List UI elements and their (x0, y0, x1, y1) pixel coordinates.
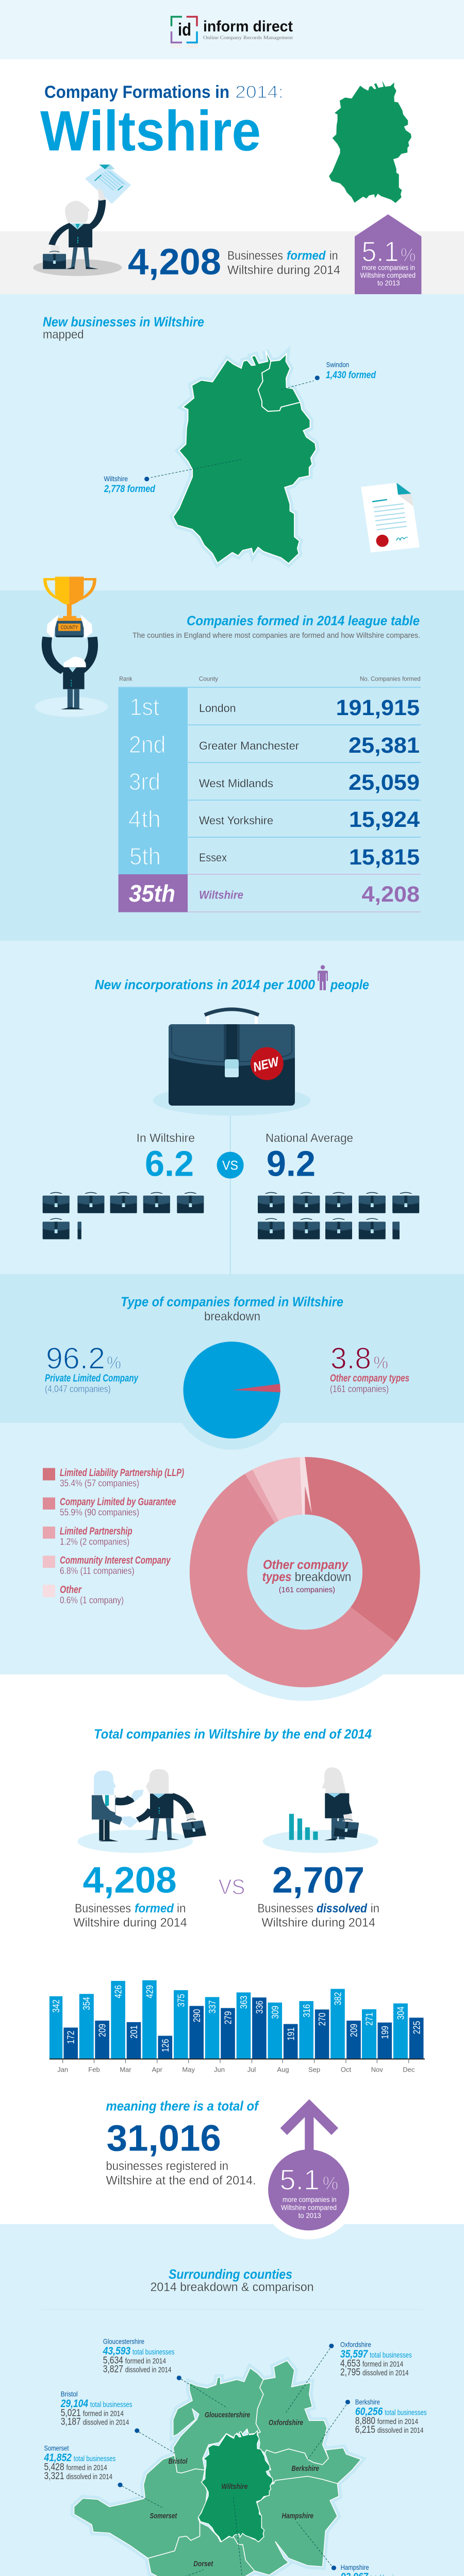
callout: 5.1% growth arrow: more companies in (283, 2195, 337, 2204)
stat: other company types: % (373, 1353, 388, 1373)
map labels: Berkshire (291, 2464, 319, 2473)
table: companies formed 2014: County (199, 675, 218, 683)
callout: Berkshire: 6,215 (355, 2425, 375, 2435)
donut chart: other company types: Other company (263, 1558, 349, 1572)
figure: two men shaking hands (77, 1769, 206, 1853)
table: companies formed 2014: Essex (199, 851, 227, 864)
icons: 6.2 briefcases (43, 1193, 204, 1239)
bar chart: formed and dissolved by month: 126 (160, 2039, 171, 2052)
pie chart: company types (172, 1330, 292, 1450)
stat: total of 31,016 (106, 2098, 259, 2188)
heading: league table: Companies formed in 2014 league table (187, 613, 420, 629)
table: companies formed 2014: West Midlands (199, 777, 273, 790)
heading: surrounding counties (41, 2266, 422, 2310)
icon: large new briefcase: NEW (252, 1054, 281, 1075)
legend: other company types: 1.2% (2 companies) (60, 1536, 129, 1547)
callout: Oxfordshire: total businesses (370, 2351, 412, 2360)
map labels: Bristol (169, 2457, 188, 2466)
table: companies formed 2014: 25,381 (349, 733, 420, 758)
stat: 4,208 businesses formed: Businesses (227, 249, 283, 263)
comparison: formed vs dissolved: 2,707 (272, 1860, 364, 1901)
map labels: Hampshire (281, 2512, 313, 2520)
bar chart: formed and dissolved by month: Oct (341, 2066, 351, 2074)
stat: 4,208 businesses formed: 4,208 (128, 242, 221, 283)
callout: Bristol (60, 2389, 132, 2428)
comparison: formed vs dissolved: Wiltshire during 2014 (262, 1916, 375, 1930)
heading: league table (132, 613, 420, 640)
callout: Hampshire: Hampshire (341, 2563, 369, 2571)
callout: Somerset (44, 2444, 115, 2482)
comparison: 6.2 vs 9.2: In Wiltshire (137, 1131, 195, 1145)
bar chart: formed and dissolved by month: 199 (380, 2026, 390, 2039)
stat: other company types (330, 1342, 409, 1394)
heading: league table: The counties in England where most companies are formed and how Wiltshire compares. (132, 631, 420, 640)
table: companies formed 2014: Wiltshire (199, 888, 243, 902)
comparison: formed vs dissolved: Businesses (257, 1902, 313, 1916)
map: Wiltshire hero (329, 80, 411, 203)
bar chart: formed and dissolved by month: Aug (277, 2066, 289, 2074)
donut chart: other company types: (161 companies) (279, 1586, 335, 1595)
callout: Gloucestershire (103, 2337, 174, 2375)
figure: man dissolving business with falling bars (263, 1768, 378, 1853)
legend: other company types: 55.9% (90 companies) (60, 1507, 139, 1518)
legend: other company types: 6.8% (11 companies) (60, 1566, 135, 1576)
callout: 5.1% more companies: more companies in (362, 263, 415, 272)
bar chart: formed and dissolved by month: 337 (207, 2000, 218, 2013)
callout: Oxfordshire: 4,653 (340, 2358, 360, 2369)
bar chart: formed and dissolved by month: 271 (364, 2012, 374, 2026)
bar chart: formed and dissolved by month: 191 (286, 2027, 296, 2041)
bar chart: formed and dissolved by month: 316 (302, 2004, 312, 2018)
legend: other company types: Limited Partnership (60, 1526, 132, 1537)
comparison: formed vs dissolved: in (371, 1902, 379, 1916)
table: companies formed 2014: 3rd (129, 768, 160, 795)
callout: Gloucestershire: formed in 2014 (125, 2357, 166, 2365)
map labels: Somerset (150, 2512, 177, 2520)
callout: Bristol: 3,187 (61, 2416, 81, 2427)
callout: Berkshire: 8,880 (355, 2416, 375, 2427)
bar chart: formed and dissolved by month: 172 (66, 2031, 76, 2044)
label: Swindon: 1,430 formed (326, 370, 376, 381)
stat: other company types: (161 companies) (330, 1384, 389, 1394)
table: companies formed 2014: 4th (128, 806, 161, 833)
legend: other company types (43, 1467, 184, 1605)
icons: 9.2 briefcases (258, 1193, 419, 1239)
legend: other company types: 35.4% (57 companies) (60, 1478, 139, 1488)
callout: 5.1% growth arrow: to 2013 (299, 2211, 321, 2219)
table: companies formed 2014: London (199, 702, 236, 715)
logo: Online Company Records Management (203, 36, 293, 41)
bar chart: formed and dissolved by month: Jun (214, 2066, 225, 2074)
callout: Gloucestershire: 3,827 (103, 2364, 123, 2375)
comparison: formed vs dissolved (73, 1860, 379, 1930)
callout: Gloucestershire: total businesses (132, 2348, 175, 2357)
map labels (150, 2411, 319, 2568)
bar chart: formed and dissolved by month: Jan (57, 2066, 68, 2074)
bar chart: formed and dissolved by month: 279 (223, 2011, 233, 2024)
heading: type of companies: Type of companies formed in Wiltshire (121, 1294, 343, 1310)
heading: new businesses mapped: mapped (43, 328, 84, 342)
comparison: formed vs dissolved: Wiltshire during 2014 (73, 1916, 187, 1930)
label: Swindon: Swindon (326, 361, 349, 369)
heading: new businesses mapped: New businesses in Wiltshire (43, 314, 204, 330)
bar chart: formed and dissolved by month: Apr (152, 2066, 163, 2074)
table: companies formed 2014: 15,815 (349, 845, 420, 870)
stat: private limited company: % (107, 1353, 121, 1373)
comparison: 6.2 vs 9.2 (137, 1131, 353, 1183)
heading: surrounding counties: Surrounding counties (169, 2266, 292, 2282)
table: companies formed 2014: Greater Manchester (199, 739, 299, 752)
stat: total of 31,016: businesses registered in (106, 2159, 228, 2173)
donut chart: other company types: types (262, 1570, 291, 1584)
legend: other company types: Community Interest Company (60, 1555, 171, 1566)
table: companies formed 2014: West Yorkshire (199, 814, 273, 827)
callout: Bristol: Bristol (61, 2389, 78, 2398)
table: companies formed 2014: 5th (129, 843, 161, 870)
callout: Gloucestershire: 5,634 (103, 2355, 123, 2366)
heading: surrounding counties: 2014 breakdown & comparison (151, 2280, 313, 2294)
heading: new incorporations per 1000 people: New incorporations in 2014 per 1000 (95, 977, 316, 992)
callout: Gloucestershire: dissolved in 2014 (125, 2365, 171, 2374)
comparison: 6.2 vs 9.2: VS (222, 1158, 238, 1173)
comparison: 6.2 vs 9.2: 9.2 (267, 1143, 316, 1183)
bar chart: formed and dissolved by month: 426 (113, 1985, 124, 1998)
callout: Berkshire: 60,256 (355, 2405, 383, 2417)
comparison: formed vs dissolved: Businesses (75, 1902, 131, 1916)
callout: Oxfordshire: formed in 2014 (362, 2360, 403, 2368)
bar chart: formed and dissolved by month: Jul (247, 2066, 256, 2074)
map: Wiltshire and Swindon (144, 351, 320, 564)
callout: 5.1% growth arrow: % (323, 2173, 338, 2194)
table: companies formed 2014: 25,059 (349, 770, 420, 795)
callout: Berkshire: Berkshire (355, 2398, 380, 2406)
table: companies formed 2014: No. Companies formed (360, 675, 421, 683)
bar chart: formed and dissolved by month: Sep (308, 2066, 320, 2074)
icon: new company document (361, 483, 420, 552)
callout: 5.1% growth arrow: Wiltshire compared (281, 2203, 337, 2211)
table: companies formed 2014: 4,208 (362, 882, 420, 907)
donut chart: other company types (176, 1444, 434, 1701)
legend: other company types: Company Limited by Guarantee (60, 1497, 176, 1508)
legend: other company types: Other (60, 1584, 82, 1596)
callout: Bristol: total businesses (90, 2400, 132, 2409)
stat: other company types: 3.8 (330, 1342, 371, 1376)
bar chart: formed and dissolved by month: 429 (144, 1985, 155, 1998)
bar chart: formed and dissolved by month: 270 (317, 2012, 327, 2026)
callout: 5.1% more companies: Wiltshire compared (360, 271, 416, 279)
callout: Somerset: formed in 2014 (66, 2464, 107, 2472)
logo: id (178, 20, 191, 40)
bar chart: formed and dissolved by month: 354 (81, 1997, 92, 2010)
map: surrounding counties (74, 2344, 361, 2576)
callout: Somerset: total businesses (74, 2454, 115, 2463)
stat: 4,208 businesses formed: Wiltshire during 2014 (227, 263, 340, 277)
map labels: Oxfordshire (269, 2418, 303, 2427)
bar chart: formed and dissolved by month: Mar (120, 2066, 131, 2074)
callout: Somerset: 5,428 (44, 2462, 64, 2473)
heading: new incorporations per 1000 people: people (330, 977, 369, 992)
map labels: Dorset (193, 2560, 213, 2568)
bar chart: formed and dissolved by month: 209 (97, 2024, 107, 2037)
comparison: formed vs dissolved: VS (219, 1875, 245, 1899)
bar chart: formed and dissolved by month: Nov (371, 2066, 383, 2074)
label: Wiltshire: 2,778 formed (104, 484, 155, 495)
callout: Somerset: Somerset (44, 2444, 69, 2452)
callout: Gloucestershire: Gloucestershire (103, 2337, 144, 2345)
label: Wiltshire: Wiltshire (104, 474, 128, 483)
comparison: formed vs dissolved: formed (135, 1902, 174, 1916)
table: companies formed 2014: 191,915 (336, 696, 420, 720)
callout: 5.1% growth arrow: 5.1 (279, 2163, 320, 2196)
icon: large new briefcase (153, 1009, 310, 1115)
stat: total of 31,016: 31,016 (107, 2119, 221, 2159)
stat: private limited company (45, 1342, 139, 1394)
callout: 5.1% more companies: % (401, 244, 416, 265)
stat: 4,208 businesses formed: formed (287, 249, 326, 263)
comparison: 6.2 vs 9.2: 6.2 (145, 1143, 194, 1183)
stat: total of 31,016: meaning there is a total of (106, 2098, 259, 2113)
bar chart: formed and dissolved by month: 342 (51, 1999, 61, 2013)
logo (171, 16, 293, 48)
legend: other company types: Limited Liability Partnership (LLP) (60, 1467, 184, 1479)
callout: 5.1% more companies (355, 214, 421, 294)
title: Wiltshire (40, 99, 261, 163)
bar chart: formed and dissolved by month: 304 (396, 2006, 406, 2020)
bar chart: formed and dissolved by month: 201 (129, 2025, 139, 2039)
callout: Berkshire: dissolved in 2014 (377, 2426, 424, 2435)
stat: private limited company: (4,047 companies) (45, 1384, 111, 1394)
heading: new incorporations per 1000 people (95, 965, 369, 992)
table: companies formed 2014: 15,924 (349, 807, 420, 832)
map labels: Gloucestershire (205, 2411, 250, 2419)
bar chart: formed and dissolved by month: 375 (176, 1994, 187, 2007)
heading: type of companies (121, 1294, 343, 1324)
map labels: Wiltshire (221, 2482, 247, 2491)
callout: Bristol: 5,021 (61, 2408, 81, 2418)
callout: 5.1% more companies: to 2013 (377, 279, 400, 287)
figure: man holding county trophy (35, 577, 108, 717)
stat: total of 31,016: Wiltshire at the end of 2014. (106, 2174, 256, 2188)
callout: Berkshire: formed in 2014 (377, 2417, 418, 2426)
label: Swindon (326, 361, 376, 381)
bar chart: formed and dissolved by month: 309 (270, 2006, 280, 2019)
callout: Oxfordshire: 2,795 (340, 2367, 360, 2378)
callout: Gloucestershire: 43,593 (103, 2345, 130, 2357)
bar chart: formed and dissolved by month: May (182, 2066, 195, 2074)
text: trophy plaque: COUNTY (61, 625, 78, 631)
stat: private limited company: 96.2 (46, 1342, 105, 1376)
callout: Oxfordshire (340, 2340, 412, 2378)
bar chart: formed and dissolved by month (49, 1980, 425, 2074)
comparison: formed vs dissolved: dissolved (317, 1902, 368, 1916)
table: companies formed 2014: Rank (119, 675, 133, 683)
comparison: 6.2 vs 9.2: National Average (266, 1131, 353, 1145)
callout: Berkshire (355, 2398, 427, 2435)
logo: inform direct (203, 18, 293, 35)
callout: Bristol: formed in 2014 (83, 2409, 124, 2418)
callout: Bristol: 29,104 (60, 2398, 88, 2410)
legend: other company types: 0.6% (1 company) (60, 1595, 124, 1605)
callout: 5.1% growth arrow (259, 2099, 358, 2240)
title: 2014: (235, 82, 284, 102)
bar chart: formed and dissolved by month: Dec (403, 2066, 415, 2074)
stat: 4,208 businesses formed: in (329, 249, 338, 263)
callout: Oxfordshire: Oxfordshire (340, 2340, 371, 2348)
callout: Bristol: dissolved in 2014 (83, 2418, 129, 2427)
title: Company Formations in (44, 82, 229, 102)
bar chart: formed and dissolved by month: 363 (239, 1996, 249, 2009)
donut chart: other company types: breakdown (295, 1570, 351, 1584)
table: companies formed 2014 (119, 675, 421, 912)
bar chart: formed and dissolved by month: Feb (88, 2066, 100, 2074)
heading: total companies: Total companies in Wiltshire by the end of 2014 (94, 1726, 372, 1742)
bar chart: formed and dissolved by month: 336 (255, 2001, 265, 2014)
callout: Oxfordshire: 35,597 (340, 2348, 368, 2360)
figure: man holding document (33, 164, 131, 276)
table: companies formed 2014: 2nd (129, 731, 166, 758)
bar chart: formed and dissolved by month: 290 (192, 2009, 202, 2022)
stat: other company types: Other company types (330, 1373, 409, 1384)
label: Wiltshire (104, 474, 155, 495)
callout: Somerset: dissolved in 2014 (66, 2472, 112, 2481)
stat: private limited company: Private Limited Company (45, 1373, 139, 1384)
callout: Berkshire: total businesses (385, 2408, 427, 2417)
bar chart: formed and dissolved by month: 209 (349, 2024, 359, 2037)
callout: Somerset: 41,852 (44, 2452, 72, 2464)
callout: Somerset: 3,321 (44, 2471, 64, 2482)
stat: 4,208 businesses formed (128, 242, 340, 283)
callout: Hampshire (341, 2563, 412, 2576)
bar chart: formed and dissolved by month: 382 (333, 1992, 343, 2005)
table: companies formed 2014: 1st (129, 693, 159, 720)
callout: Oxfordshire: dissolved in 2014 (362, 2369, 409, 2378)
table: companies formed 2014: 35th (129, 880, 175, 907)
callout: 5.1% more companies: 5.1 (362, 235, 399, 267)
comparison: formed vs dissolved: in (177, 1902, 186, 1916)
bar chart: formed and dissolved by month: 225 (411, 2021, 422, 2034)
comparison: formed vs dissolved: 4,208 (83, 1860, 177, 1901)
heading: type of companies: breakdown (204, 1310, 260, 1324)
heading: new businesses mapped (43, 314, 204, 342)
